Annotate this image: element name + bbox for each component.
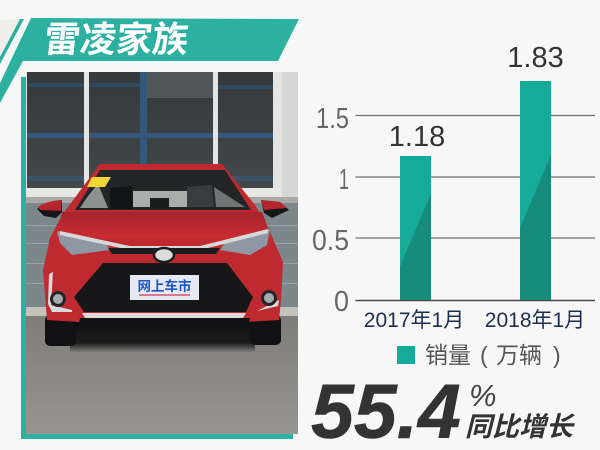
legend: 万辆 (496, 336, 542, 370)
value: 1.83: 1.83 (507, 42, 564, 74)
body (43, 164, 283, 322)
y axis labels: 0.5 (312, 225, 349, 257)
callout: 55.4% growth: 同比增长 (465, 405, 575, 444)
yellow sticker (87, 177, 111, 187)
licence plate (130, 275, 199, 300)
badge (154, 248, 174, 262)
y axis labels: 0 (334, 286, 349, 318)
grille (74, 263, 253, 312)
x axis label 2018: 2018年1月 (485, 309, 585, 332)
value: 1.18: 1.18 (389, 121, 445, 153)
y axis labels (312, 103, 349, 318)
legend (397, 336, 561, 370)
bar chart (312, 42, 595, 332)
car (37, 164, 289, 352)
under-car shadow (70, 322, 255, 352)
legend: 销量 (425, 336, 471, 370)
panel: car photo (26, 72, 298, 434)
chrome bar (60, 229, 268, 250)
bar: 2018年1月 (520, 81, 551, 300)
headlights (57, 231, 110, 255)
y axis labels: 1.5 (316, 103, 349, 135)
fog lights (50, 291, 66, 307)
building background (26, 72, 298, 434)
title text: 雷凌家族 (42, 11, 191, 63)
bar: 2017年1月 (400, 156, 431, 300)
car: 网上车市 (138, 275, 192, 295)
y axis labels: 1 (339, 164, 349, 196)
callout: 55.4% growth (311, 369, 575, 450)
windshield (75, 170, 251, 210)
photo frame accent (21, 77, 293, 439)
legend: ) (553, 342, 561, 368)
mirrors (37, 200, 289, 218)
grid lines (356, 116, 595, 238)
x axis label 2017: 2017年1月 (364, 309, 464, 332)
title banner (0, 11, 299, 103)
legend: ( (480, 342, 488, 368)
tyres (45, 315, 76, 346)
callout: 55.4% growth: % (469, 378, 497, 413)
